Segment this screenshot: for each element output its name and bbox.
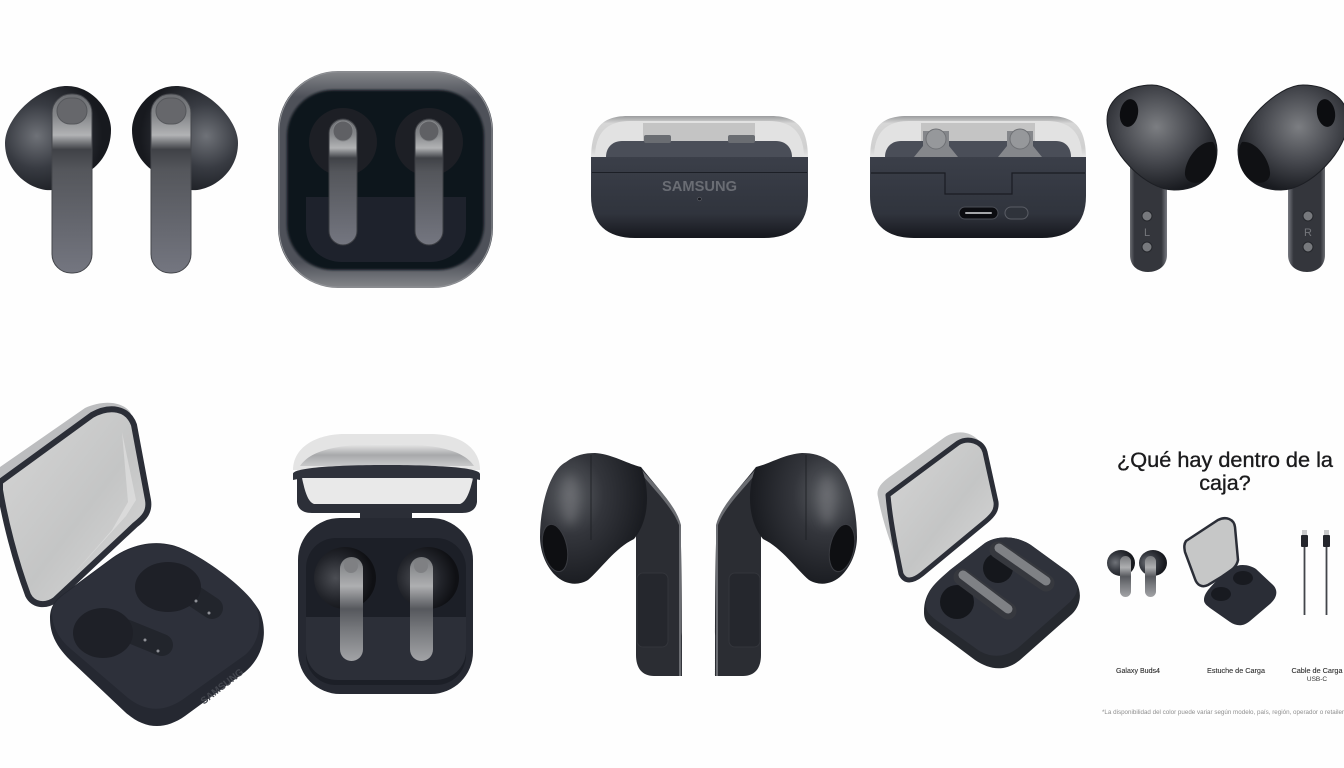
label: cable type: USB-C [1307,676,1327,683]
L mark: L [1144,227,1150,239]
small earbuds [1107,550,1167,597]
base [50,543,264,726]
open empty case angled [0,403,264,726]
right earbud side [715,453,859,676]
left stem in case [329,119,357,245]
earbuds back pair [1107,85,1344,272]
R mark: R [1304,227,1312,239]
far earbud in case [983,548,1046,583]
right earbud back [1238,85,1344,272]
pairing button [1005,207,1028,219]
panel: what's in the box [1102,448,1344,716]
base logo: SAMSUNG [199,667,246,707]
small open case [1184,518,1276,625]
left earbud in case [314,547,376,661]
lid [293,434,480,513]
USB-C cable left [1301,530,1308,615]
USB-C cable right [1323,530,1330,615]
label: earbuds: Galaxy Buds4 [1116,668,1160,675]
brand logo: SAMSUNG [662,178,737,195]
label: charging case: Estuche de Carga [1207,668,1265,675]
lid hinge outline [871,173,1085,194]
closed case back view [870,116,1086,238]
indicator light [698,197,701,201]
closed case front view [591,116,808,238]
heading: ¿Qué hay dentro de la [1117,448,1333,472]
closed case top view [278,71,493,288]
base [298,518,473,694]
heading second line: caja? [1199,471,1251,495]
right well [135,562,212,612]
hinge [360,508,412,530]
right earbud in case [397,547,459,661]
tray top [52,544,259,709]
lid [877,432,996,580]
left earbud front [5,86,111,273]
near earbud in case [940,575,1008,619]
earbuds front pair [5,86,238,273]
tray top [926,537,1077,656]
open case with earbuds front [293,434,480,694]
USB-C port [959,207,998,219]
charging contacts [144,600,210,652]
left earbud side [538,453,682,676]
right earbud front [132,86,238,273]
left earbud back [1107,85,1217,272]
open case with earbuds angled [877,432,1080,668]
right stem in case [415,119,443,245]
earbuds side view pair [538,453,859,676]
base [924,537,1080,668]
label: cable: Cable de Carga [1292,668,1343,675]
left well [73,608,162,658]
lid [0,403,148,604]
